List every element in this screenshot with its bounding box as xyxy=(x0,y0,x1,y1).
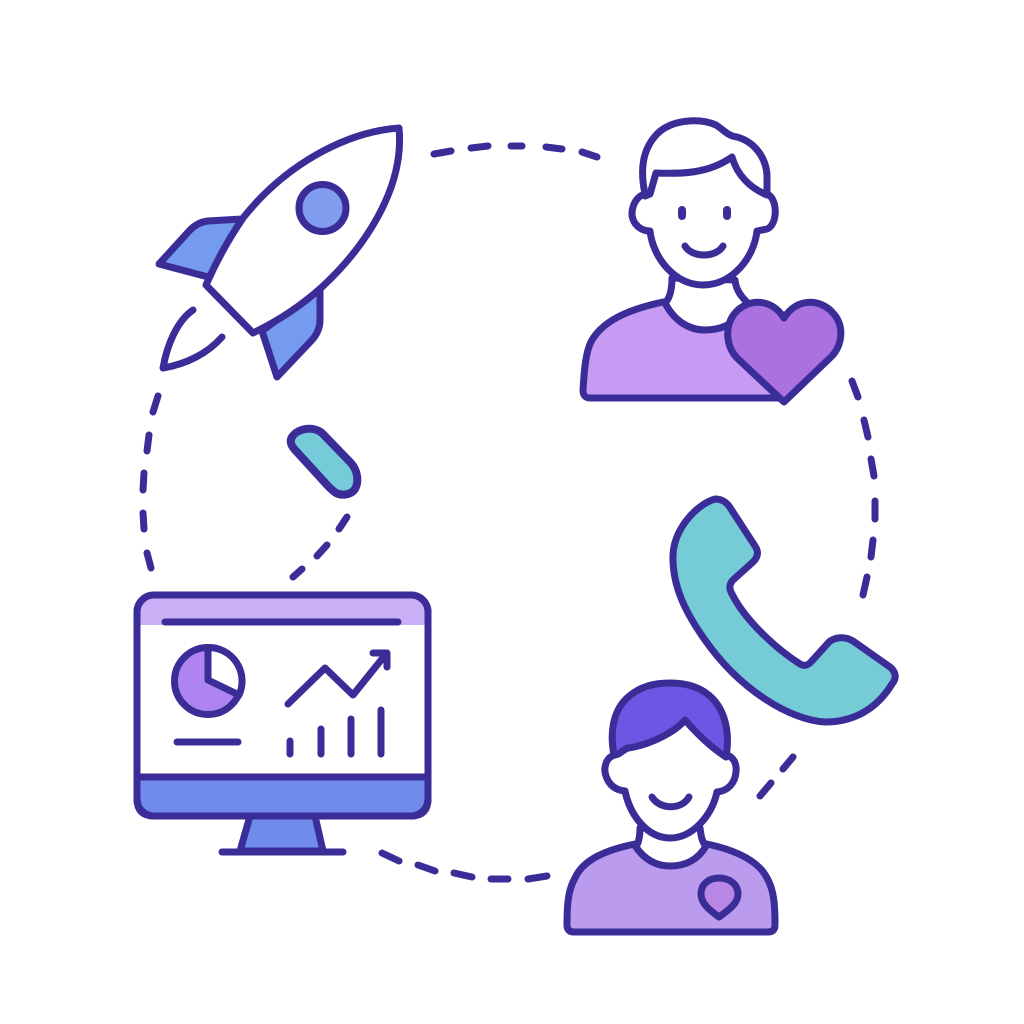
pie chart xyxy=(174,647,242,714)
rocket right fin xyxy=(262,288,320,377)
monitor screen xyxy=(137,595,428,816)
trend arrow xyxy=(288,653,387,704)
monitor top bar xyxy=(139,597,426,625)
customer neck xyxy=(665,278,750,330)
customer hair line xyxy=(645,157,767,196)
icon: phone handset xyxy=(673,499,895,722)
icon: support agent xyxy=(567,683,775,932)
agent neck xyxy=(636,828,706,866)
arrow: dashed path agent to monitor xyxy=(382,853,547,879)
arrow: dashed path customer to phone xyxy=(852,381,875,595)
rocket flame xyxy=(163,310,222,368)
customer head xyxy=(632,121,775,285)
icon: rocket xyxy=(159,128,400,377)
customer torso xyxy=(583,302,785,398)
rocket window xyxy=(299,184,346,232)
icon: monitor dashboard xyxy=(137,595,428,852)
monitor base xyxy=(222,848,343,856)
heart xyxy=(728,302,841,402)
agent hair xyxy=(612,683,727,757)
arrow: short dashed path monitor to capsule xyxy=(293,517,347,577)
agent badge xyxy=(701,878,738,917)
icon: customer with heart xyxy=(583,121,841,402)
bar chart xyxy=(290,710,381,754)
monitor stand xyxy=(240,816,323,851)
pie caption line xyxy=(177,738,238,746)
monitor frame xyxy=(137,595,428,816)
agent smile xyxy=(652,797,689,807)
header line xyxy=(165,618,398,626)
customer eyes xyxy=(682,210,727,216)
arrow: dashed path monitor to rocket xyxy=(143,396,158,568)
rocket left fin xyxy=(159,219,242,278)
monitor bottom bar xyxy=(137,777,428,816)
agent torso xyxy=(567,844,775,932)
icon: capsule xyxy=(291,429,357,495)
agent head xyxy=(605,720,736,838)
arrow: dashed path phone to agent xyxy=(760,757,793,796)
customer smile xyxy=(685,246,723,255)
rocket body xyxy=(206,128,400,333)
arrow: dashed path rocket to customer xyxy=(434,146,597,157)
